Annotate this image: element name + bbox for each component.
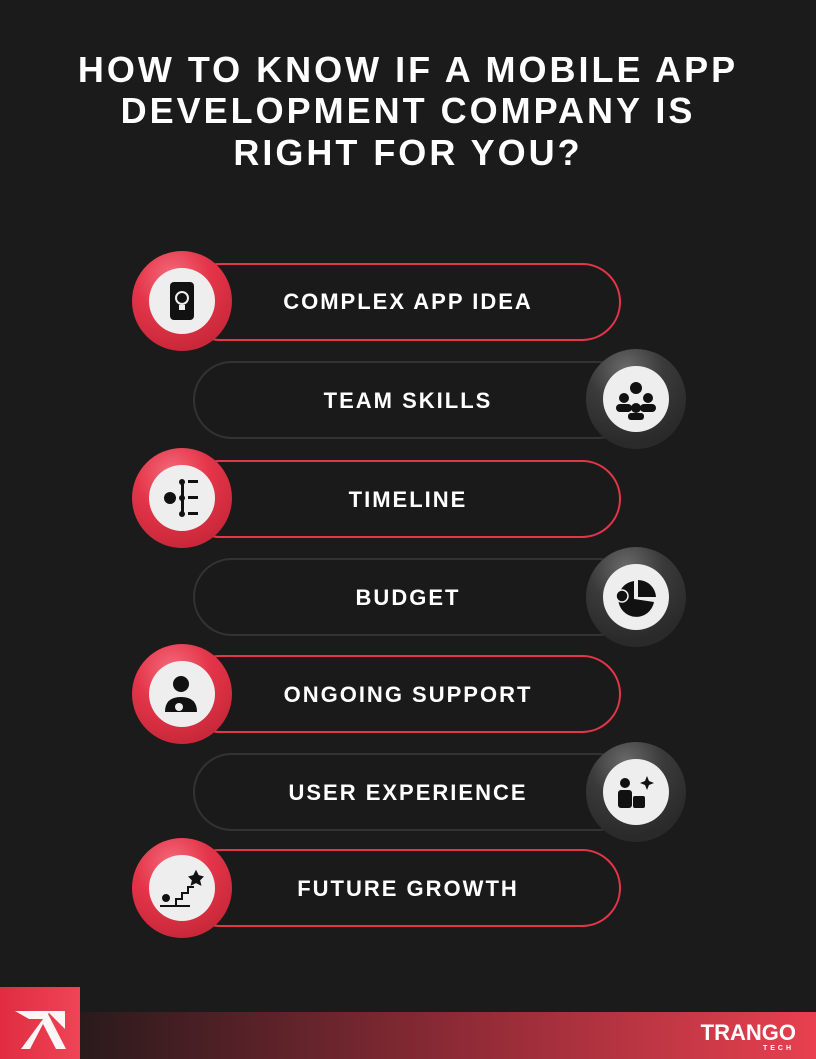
icon: stairs [160, 872, 202, 906]
logo square [0, 987, 80, 1059]
item: future growth [132, 838, 620, 938]
brand text: TRANGO [701, 1020, 796, 1045]
item: user experience: USER EXPERIENCE [288, 780, 528, 805]
item: team skills: TEAM SKILLS [324, 388, 492, 413]
title: RIGHT FOR YOU? [233, 132, 583, 173]
title: DEVELOPMENT COMPANY IS [121, 90, 695, 131]
title: HOW TO KNOW IF A MOBILE APP [78, 49, 738, 90]
icon: team [616, 382, 656, 420]
item: complex app idea: COMPLEX APP IDEA [283, 289, 533, 314]
item: timeline [132, 448, 620, 548]
icon: pie chart [616, 580, 656, 617]
icon: support agent [165, 676, 197, 712]
icon: phone bulb [170, 282, 194, 320]
icon: timeline [164, 479, 198, 517]
item: future growth: FUTURE GROWTH [297, 876, 519, 901]
item: complex app idea [132, 251, 620, 351]
icon: user thumbs up [618, 776, 654, 808]
item: budget: BUDGET [356, 585, 460, 610]
item: ongoing support [132, 644, 620, 744]
item: user experience [194, 742, 686, 842]
item: timeline: TIMELINE [349, 487, 467, 512]
footer bar [80, 1012, 816, 1059]
item: budget [194, 547, 686, 647]
item: ongoing support: ONGOING SUPPORT [284, 682, 532, 707]
title [78, 49, 738, 173]
item: team skills [194, 349, 686, 449]
brand text: TECH [763, 1045, 794, 1052]
